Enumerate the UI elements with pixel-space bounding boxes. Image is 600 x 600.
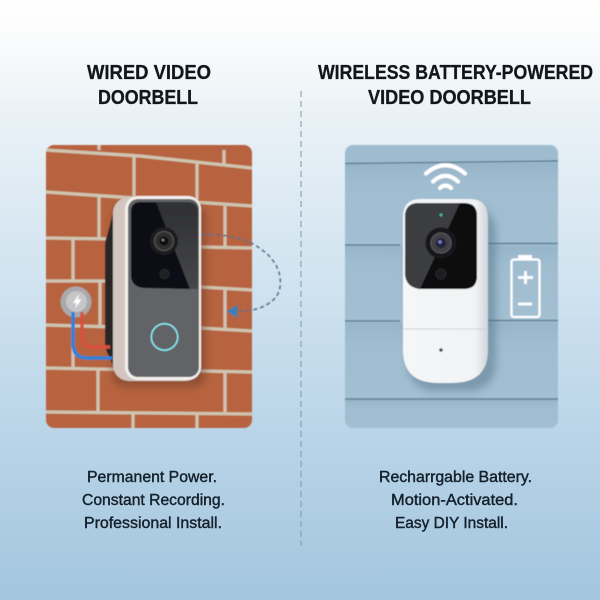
heading: wireless: VIDEO DOORBELL [368, 87, 531, 109]
heading: wired [87, 62, 211, 109]
power socket with bolt [60, 286, 92, 318]
lens [150, 227, 178, 255]
lens [426, 228, 456, 258]
panel: wired doorbell on brick wall [46, 145, 280, 428]
heading: wired: WIRED VIDEO [87, 62, 211, 84]
text block: wired features [82, 469, 225, 532]
microphone dot [439, 348, 443, 352]
sensor [160, 270, 169, 278]
status ring button [151, 324, 178, 350]
battery icon [512, 255, 540, 317]
brick wall [46, 145, 252, 428]
dashed arrow [202, 234, 280, 318]
camera window [131, 202, 198, 289]
LED [440, 214, 442, 216]
text block: wired features: Permanent Power. [87, 469, 217, 486]
text block: wireless features: Recharrgable Battery. [379, 469, 532, 486]
dark back plate [105, 202, 116, 372]
text block: wireless features: Easy DIY Install. [395, 515, 508, 532]
power wires [73, 312, 112, 358]
camera window [405, 203, 477, 289]
heading: wireless [318, 62, 593, 109]
centre divider [300, 91, 302, 546]
heading: wired: DOORBELL [98, 87, 198, 109]
text block: wireless features [379, 469, 532, 532]
text block: wired features: Professional Install. [84, 515, 222, 532]
text block: wireless features: Motion-Activated. [391, 492, 518, 509]
text block: wired features: Constant Recording. [82, 492, 225, 509]
sensor [436, 269, 446, 279]
wireless doorbell body [403, 199, 488, 383]
doorbell shadow [408, 205, 496, 391]
siding wall [345, 145, 558, 428]
doorbell shadow [112, 205, 206, 387]
wired doorbell body [113, 196, 201, 381]
panel: wireless doorbell on siding [345, 145, 558, 428]
wifi icon [426, 165, 465, 188]
